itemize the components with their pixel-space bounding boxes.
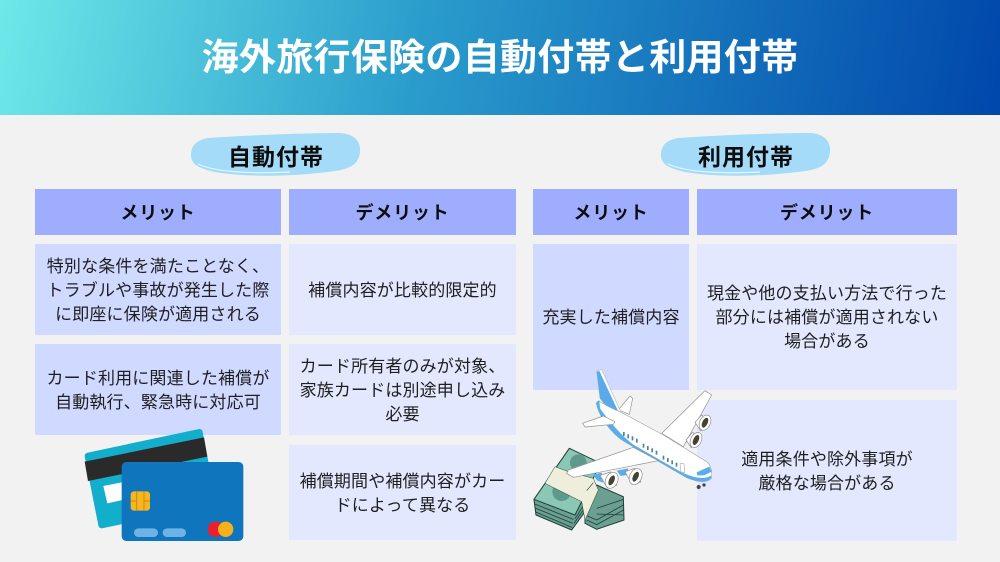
- 利用付帯 demerit 2: [697, 400, 957, 541]
- 自動付帯 merit 2: 自動執行、緊急時に対応可: [55, 392, 261, 412]
- fuselage: [597, 401, 712, 482]
- 利用付帯 demerit 1: 部分には補償が適用されない: [716, 308, 938, 327]
- 自動付帯 merit 1: トラブルや事故が発生した際: [47, 280, 269, 300]
- heading: 利用付帯: [661, 133, 830, 176]
- near engines: [600, 467, 645, 490]
- 自動付帯 merit 1: 特別な条件を満たことなく、: [47, 256, 269, 276]
- 自動付帯 demerit 1: 補償内容が比較的限定的: [308, 280, 497, 300]
- far wing: [662, 391, 712, 447]
- 自動付帯 merit header: メリット: [120, 203, 196, 223]
- 利用付帯 demerit 1: 場合がある: [784, 332, 870, 351]
- 自動付帯 demerit 2: 必要: [385, 404, 420, 424]
- windows: [623, 432, 677, 467]
- far engines: [686, 413, 713, 450]
- heading: 自動付帯: [191, 133, 360, 176]
- 自動付帯 merit 2: [35, 344, 281, 435]
- tail fin: [597, 369, 621, 413]
- wheels: [697, 485, 701, 489]
- heading: 利用付帯: 利用付帯: [698, 144, 794, 170]
- 利用付帯 demerit header: [697, 189, 957, 235]
- 自動付帯 demerit 2: カード所有者のみが対象、: [300, 356, 505, 376]
- 自動付帯 demerit 3: [289, 445, 516, 540]
- title banner: 海外旅行保険の自動付帯と利用付帯: [202, 37, 798, 78]
- 利用付帯 demerit header: デメリット: [780, 203, 874, 223]
- 自動付帯 merit 1: [35, 244, 281, 335]
- door: [680, 463, 685, 473]
- title banner: [0, 0, 1000, 115]
- far tail: [618, 396, 633, 414]
- icon: cash bundles and airplane: [534, 369, 712, 530]
- 自動付帯 merit 2: カード利用に関連した補償が: [47, 368, 269, 388]
- 自動付帯 demerit 2: 家族カードは別途申し込み: [300, 380, 505, 400]
- 利用付帯 demerit 1: [697, 244, 957, 390]
- stabilizer: [583, 416, 615, 427]
- 自動付帯 merit header: [35, 189, 281, 235]
- icon: credit cards: [84, 429, 244, 541]
- 利用付帯 merit header: メリット: [573, 203, 649, 223]
- 利用付帯 merit 1: [533, 244, 689, 390]
- near wing: [567, 447, 658, 477]
- 利用付帯 merit header: [533, 189, 689, 235]
- 自動付帯 demerit header: デメリット: [356, 203, 450, 223]
- 自動付帯 demerit 1: [289, 244, 516, 335]
- cash bundles: [534, 448, 624, 530]
- 利用付帯 merit 1: 充実した補償内容: [542, 308, 680, 327]
- heading: 自動付帯: 自動付帯: [228, 144, 324, 170]
- near engine pylons: [593, 473, 603, 483]
- 利用付帯 demerit 1: 現金や他の支払い方法で行った: [707, 284, 947, 303]
- 利用付帯 demerit 2: 適用条件や除外事項が: [741, 450, 913, 468]
- airplane: [567, 369, 713, 490]
- 利用付帯 demerit 2: 厳格な場合がある: [758, 474, 896, 492]
- 自動付帯 demerit 2: [289, 344, 516, 435]
- 自動付帯 demerit 3: 補償期間や補償内容がカー: [300, 472, 505, 490]
- 自動付帯 demerit header: [289, 189, 516, 235]
- 自動付帯 merit 1: に即座に保険が適用される: [55, 304, 261, 324]
- 自動付帯 demerit 3: ドによって異なる: [335, 496, 470, 514]
